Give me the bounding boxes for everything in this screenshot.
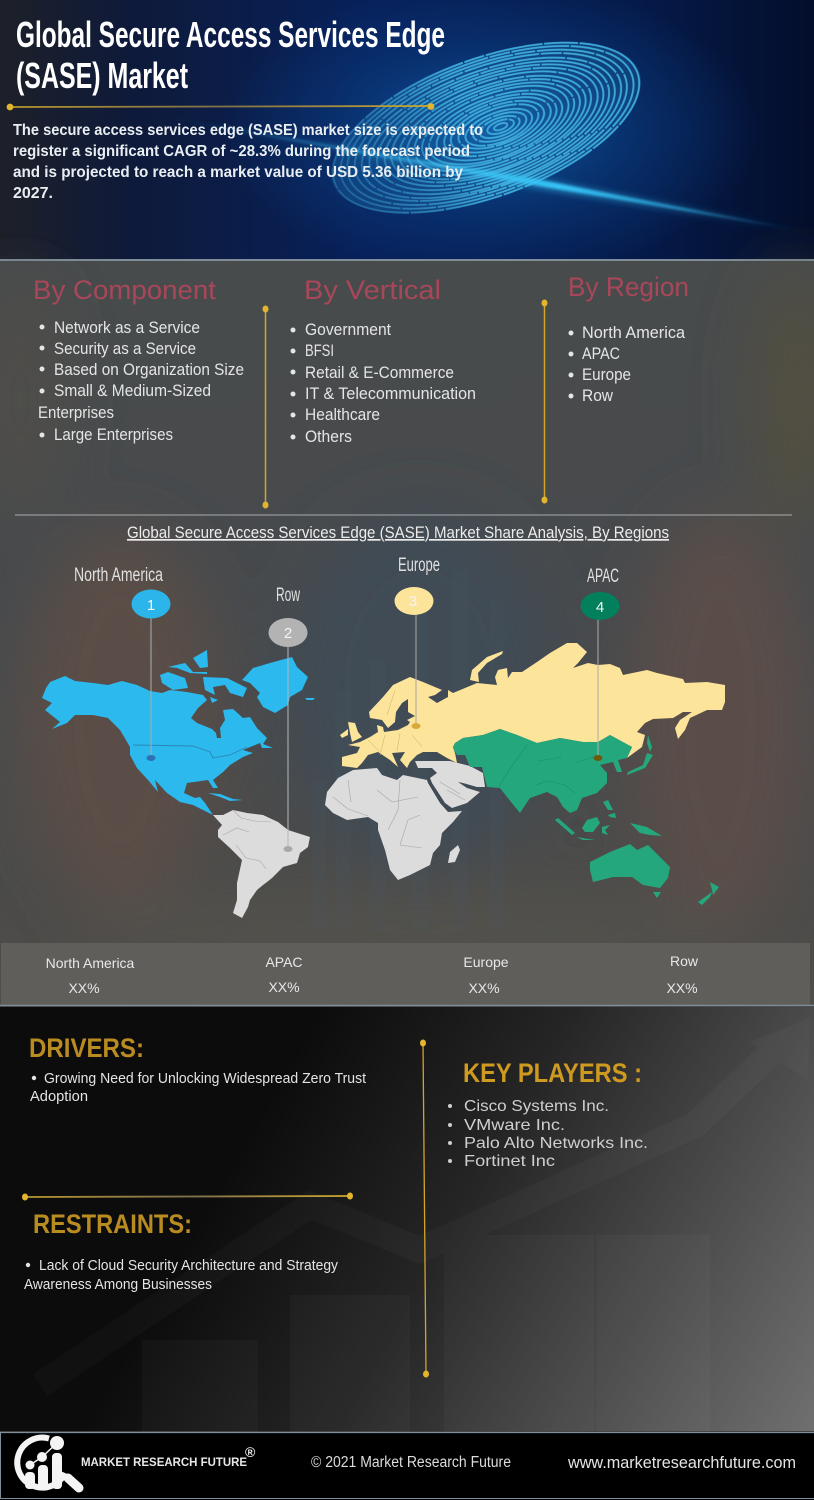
callout: APAC: [580, 566, 620, 761]
callout: North America: North America: [74, 565, 163, 586]
border details: [133, 745, 247, 758]
region: North America: [42, 650, 315, 815]
text: Adoption: [30, 1088, 88, 1105]
section: key players: [448, 1058, 648, 1170]
icon: market research future logo: [17, 1436, 79, 1489]
horizontal gold divider: [22, 1192, 353, 1200]
list: North America: [582, 323, 686, 342]
callout: Europe: 3: [409, 593, 417, 610]
panel: segments and map background: [0, 259, 814, 1006]
panel: drivers, restraints, key players: [0, 1007, 814, 1432]
intro text: register a significant CAGR of ~28.3% during the forecast period: [13, 143, 470, 160]
heading: By Region: [568, 272, 689, 302]
column divider 1: [262, 306, 268, 508]
callout: North America: 1: [147, 597, 155, 614]
region: Row: [213, 761, 485, 918]
list: Network as a Service: [54, 318, 200, 337]
list: Europe: [582, 365, 631, 384]
list: Cisco Systems Inc.: [464, 1098, 609, 1115]
list: IT & Telecommunication: [305, 384, 476, 403]
callout: Europe: [394, 555, 440, 729]
list: BFSI: [305, 341, 334, 360]
title: Global Secure Access Services Edge: [16, 14, 445, 55]
callout: APAC: 4: [596, 599, 604, 616]
list: Others: [305, 427, 352, 446]
divider with gold dots: [7, 103, 434, 110]
intro text: The secure access services edge (SASE) market size is expected to: [13, 122, 483, 139]
text: [24, 1257, 338, 1293]
panel: region share table: XX%: [68, 980, 100, 996]
panel: footer: [0, 1432, 814, 1500]
list: Retail & E-Commerce: [305, 363, 454, 382]
list: Fortinet Inc: [464, 1153, 555, 1170]
website: www.marketresearchfuture.com: [567, 1454, 796, 1472]
list: Security as a Service: [54, 339, 196, 358]
list: [290, 320, 476, 446]
map heading: Global Secure Access Services Edge (SASE) Market Share Analysis, By Regions: [127, 523, 669, 542]
region: Europe: [340, 643, 725, 768]
region: APAC: [453, 729, 719, 905]
icon: fingerprint: [309, 7, 663, 248]
callout: Row: [268, 585, 308, 852]
panel: region share table: Europe: [463, 954, 509, 970]
section: drivers: [29, 1033, 367, 1105]
panel: region share table: XX%: [666, 980, 698, 996]
heading: DRIVERS:: [29, 1033, 144, 1063]
intro text: 2027.: [13, 185, 53, 202]
faint growth chart background: [40, 1018, 810, 1432]
heading: By Vertical: [304, 275, 441, 305]
text: Growing Need for Unlocking Widespread Zero Trust: [44, 1070, 367, 1087]
panel: region share table: North America: [46, 955, 135, 971]
panel: region share table: APAC: [265, 954, 303, 970]
column: By Region: [568, 272, 689, 405]
list: [448, 1098, 648, 1170]
list: Enterprises: [38, 403, 114, 422]
chart: world map: [42, 643, 725, 918]
callout: Row: Row: [276, 585, 300, 606]
list: [568, 323, 686, 405]
list: [38, 318, 244, 444]
callout: North America: [74, 565, 170, 761]
title: (SASE) Market: [16, 55, 188, 96]
text: Lack of Cloud Security Architecture and Strategy: [39, 1257, 338, 1274]
panel: region share table: XX%: [268, 979, 300, 995]
logo wordmark: MARKET RESEARCH FUTURE: [81, 1457, 247, 1469]
column: By Component: [33, 275, 244, 444]
text: Awareness Among Businesses: [24, 1276, 212, 1293]
title: [16, 14, 445, 96]
callout: Row: 2: [284, 625, 292, 642]
list: APAC: [582, 344, 620, 363]
intro text: and is projected to reach a market value of USD 5.36 billion by: [13, 164, 463, 181]
list: Palo Alto Networks Inc.: [464, 1135, 648, 1152]
list: Based on Organization Size: [54, 360, 244, 379]
intro text: [13, 122, 483, 202]
heading: RESTRAINTS:: [33, 1209, 192, 1239]
column: By Vertical: [290, 275, 476, 446]
panel: region share table: Row: [670, 953, 699, 969]
list: Row: [582, 386, 614, 405]
panel: region share table: XX%: [468, 980, 500, 996]
column divider 2: [542, 300, 548, 504]
list: Small & Medium-Sized: [54, 381, 211, 400]
text: [30, 1070, 367, 1105]
panel: region share table: [0, 943, 814, 1006]
panel: header banner: [0, 0, 814, 280]
light beam: [140, 113, 814, 233]
copyright: © 2021 Market Research Future: [311, 1454, 511, 1471]
registered mark: ®: [245, 1444, 256, 1460]
section: restraints: [24, 1209, 338, 1293]
callout: Europe: Europe: [398, 555, 440, 576]
list: VMware Inc.: [464, 1117, 565, 1134]
heading: KEY PLAYERS :: [463, 1058, 642, 1088]
list: Healthcare: [305, 405, 380, 424]
heading: By Component: [33, 275, 216, 305]
list: Government: [305, 320, 391, 339]
vertical gold divider: [420, 1040, 429, 1378]
list: Large Enterprises: [54, 425, 173, 444]
callout: APAC: APAC: [587, 566, 619, 587]
